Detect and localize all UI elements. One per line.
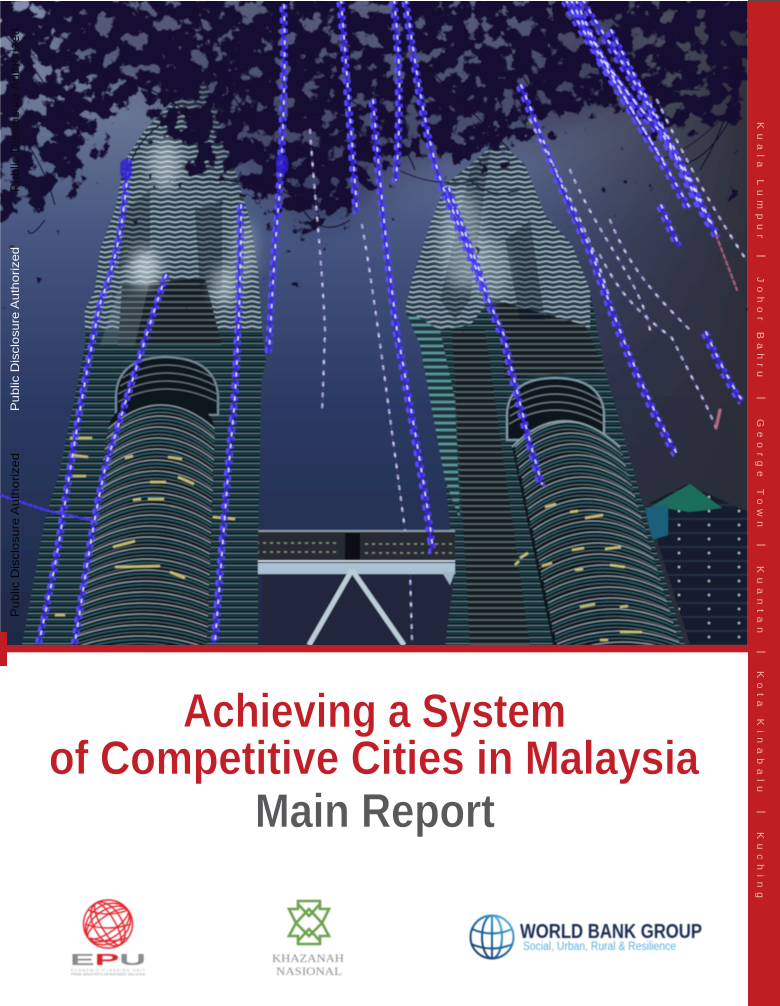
subtitle: Main Report [255,784,495,837]
red sidebar with city names: Kuching [754,832,766,898]
red sidebar with city names: Kuantan [754,566,766,633]
cover photo: Petronas towers at night [0,0,768,662]
red horizontal band [0,632,748,666]
disclosure stamp: bottom: Public Disclosure Authorized [8,453,22,617]
logo: World Bank Group: WORLD BANK GROUP [520,921,702,943]
logo: World Bank Group [470,915,702,959]
title [49,684,700,784]
red sidebar with city names: Kota Kinabalu [754,671,766,792]
logo: EPU: ECONOMIC PLANNING UNIT [71,968,145,972]
background building [645,484,748,645]
logo: Khazanah Nasional: KHAZANAH [272,953,344,965]
red sidebar with city names: Kuala Lumpur [754,122,766,239]
night sky [0,0,748,646]
left tower [22,75,266,655]
logo: EPU: PRIME MINISTER'S DEPARTMENT MALAYSIA [71,972,146,976]
logo: Khazanah Nasional [272,901,344,978]
blue string lights [0,0,745,645]
red sidebar with city names: Johor Bahru [754,277,766,377]
disclosure stamp: middle: Public Disclosure Authorized [8,247,22,411]
title: Achieving a System [183,684,566,737]
logo: Khazanah Nasional: NASIONAL [276,966,342,978]
disclosure stamp: top: Public Disclosure Authorized [8,28,22,192]
red sidebar with city names: George Town [754,419,766,527]
red sidebar with city names [748,0,780,1006]
logo: EPU: E P U [70,952,146,969]
right tower [405,140,686,662]
title: of Competitive Cities in Malaysia [49,731,700,784]
logo: World Bank Group: Social, Urban, Rural & Resilience [523,941,676,953]
sky bridge [253,530,455,645]
logo: EPU [70,895,146,976]
tree canopy [0,0,768,296]
